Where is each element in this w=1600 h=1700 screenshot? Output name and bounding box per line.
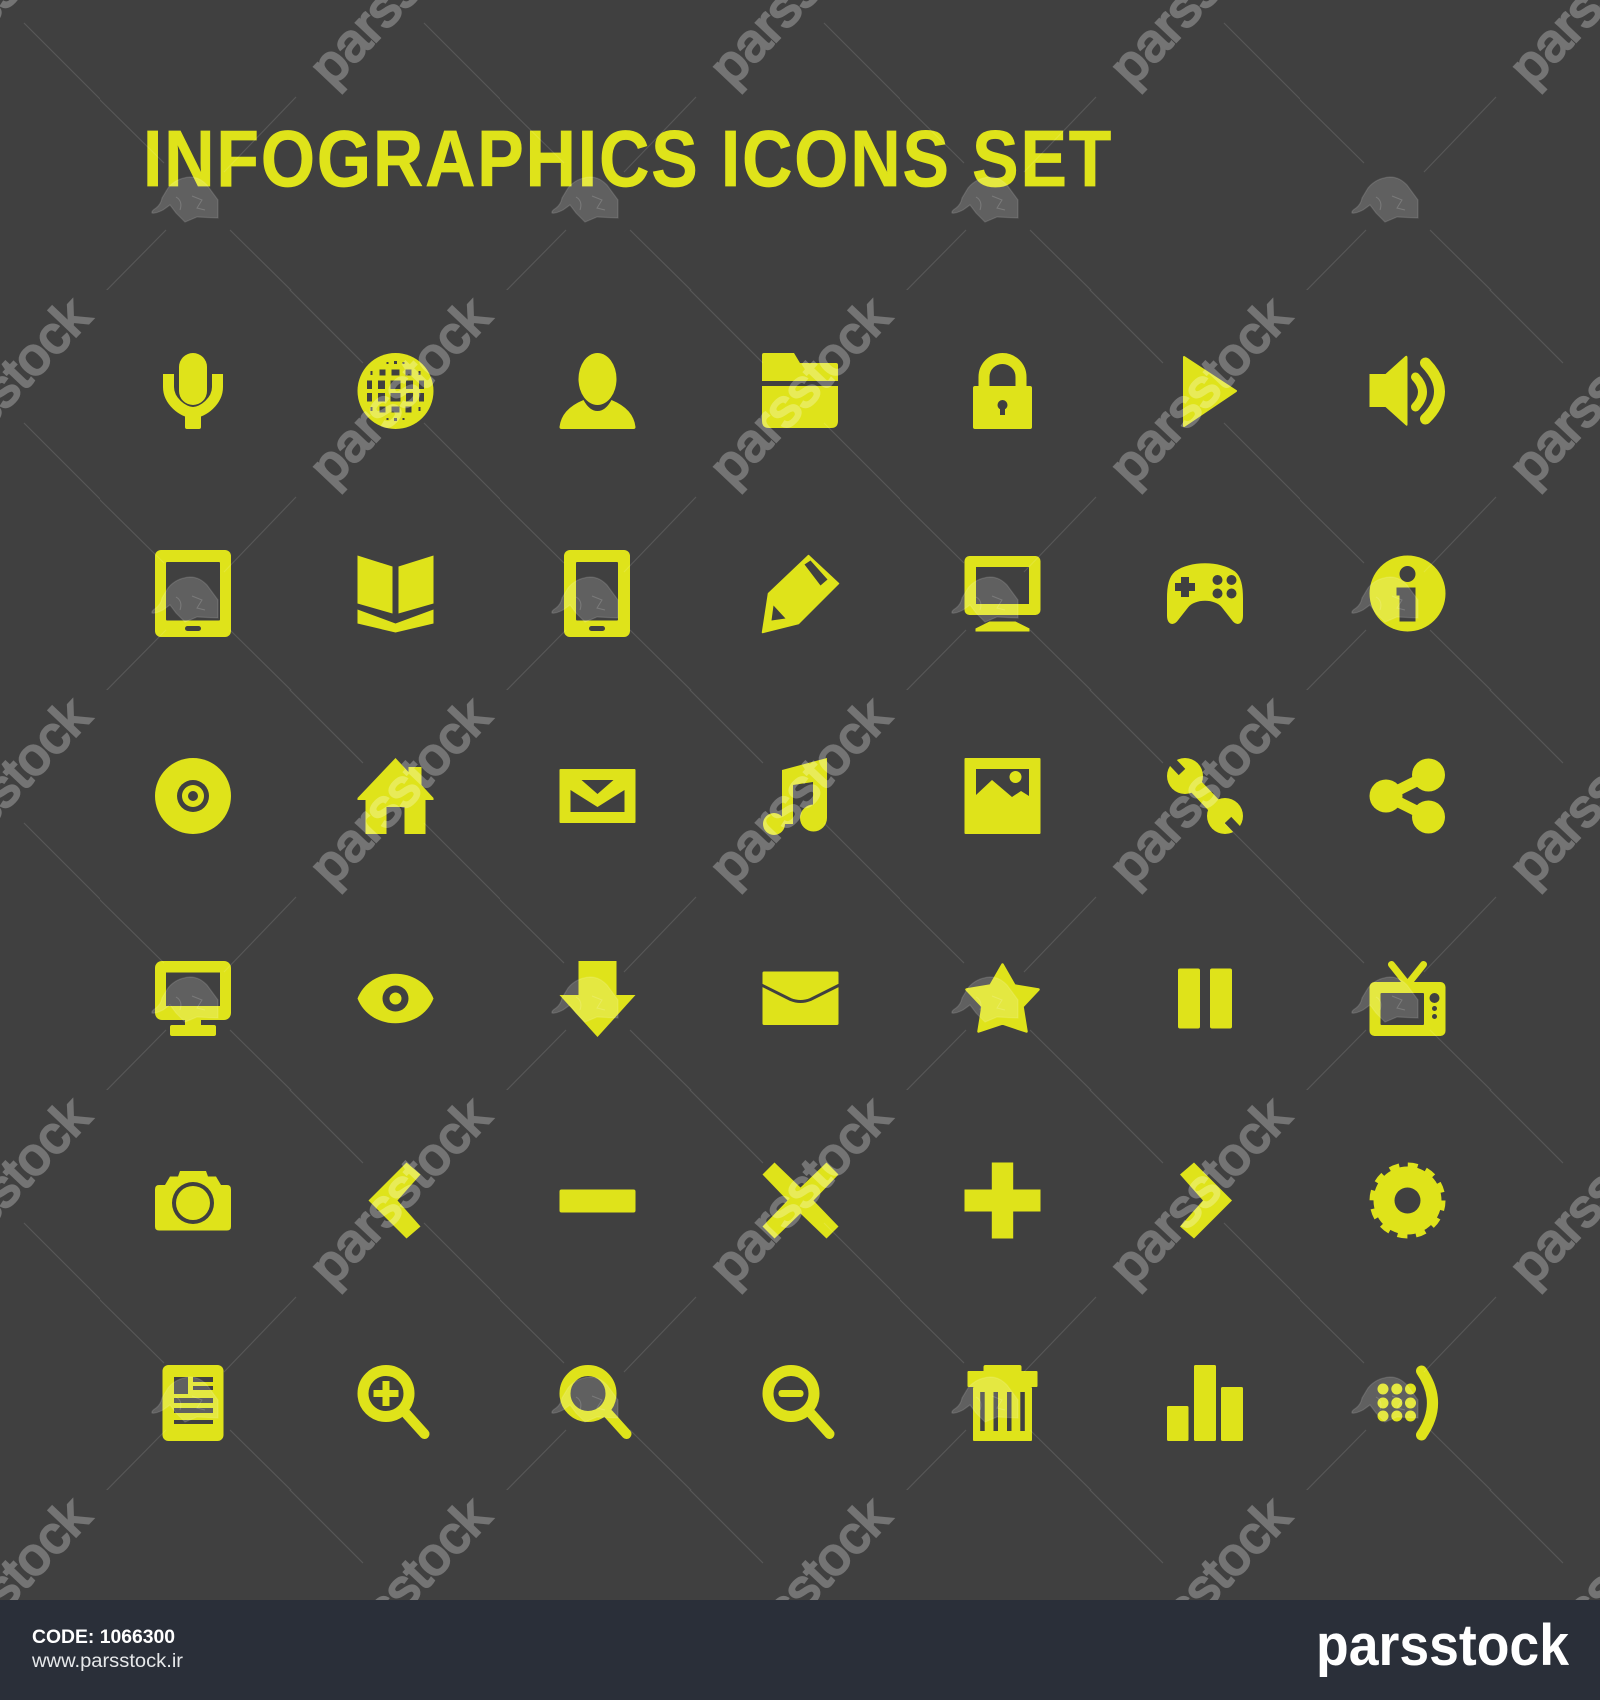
icon: monitor <box>964 556 1040 632</box>
footer url: www.parsstock.ir <box>31 1651 184 1672</box>
icon: plus <box>964 1162 1040 1238</box>
icon: picture <box>964 758 1040 834</box>
icon: television <box>1370 964 1446 1036</box>
icon: play <box>1184 357 1236 426</box>
icon: house <box>358 758 434 834</box>
footer band <box>0 1600 1600 1700</box>
icon: wrench <box>1163 752 1247 840</box>
icon: trash can <box>968 1365 1038 1441</box>
icon: music note <box>763 758 827 835</box>
icon: gamepad <box>1167 563 1243 624</box>
icon: bar chart <box>1167 1365 1243 1441</box>
icon: pencil <box>762 556 838 632</box>
icon: zoom out <box>768 1370 830 1434</box>
icon: phone dial <box>1378 1371 1432 1435</box>
icon: microphone <box>168 353 218 429</box>
icon: globe <box>358 353 434 429</box>
icon: tablet <box>155 550 231 637</box>
icon: framed envelope <box>560 769 636 823</box>
icon: user <box>560 353 636 429</box>
footer logo: parsstock <box>1316 1613 1570 1678</box>
icon: folder <box>762 353 838 428</box>
icon: eye <box>358 974 434 1023</box>
icon: down arrow <box>560 961 636 1037</box>
icon: camera <box>155 1171 231 1230</box>
icon: envelope <box>760 972 840 1025</box>
icon: pause <box>1178 968 1232 1028</box>
icon: zoom in <box>363 1370 424 1434</box>
icon: desktop monitor <box>155 961 231 1036</box>
footer code: CODE: 1066300 <box>32 1627 175 1648</box>
icon: padlock <box>973 358 1032 429</box>
icon: smartphone <box>564 550 630 637</box>
icon: open book <box>358 556 434 632</box>
icon: info <box>1370 556 1446 632</box>
title: INFOGRAPHICS ICONS SET <box>143 113 1111 203</box>
icon: disc <box>155 758 231 834</box>
icon: close <box>762 1162 838 1238</box>
icon: share <box>1370 758 1445 834</box>
icon: chevron right <box>1180 1162 1232 1238</box>
icon: document <box>162 1365 224 1441</box>
icon: chevron left <box>368 1162 420 1238</box>
icon: speaker <box>1370 356 1440 426</box>
icon: minus <box>560 1190 636 1212</box>
icon: star <box>966 964 1038 1032</box>
icon: search <box>565 1370 626 1434</box>
icon: gear <box>1372 1165 1443 1236</box>
